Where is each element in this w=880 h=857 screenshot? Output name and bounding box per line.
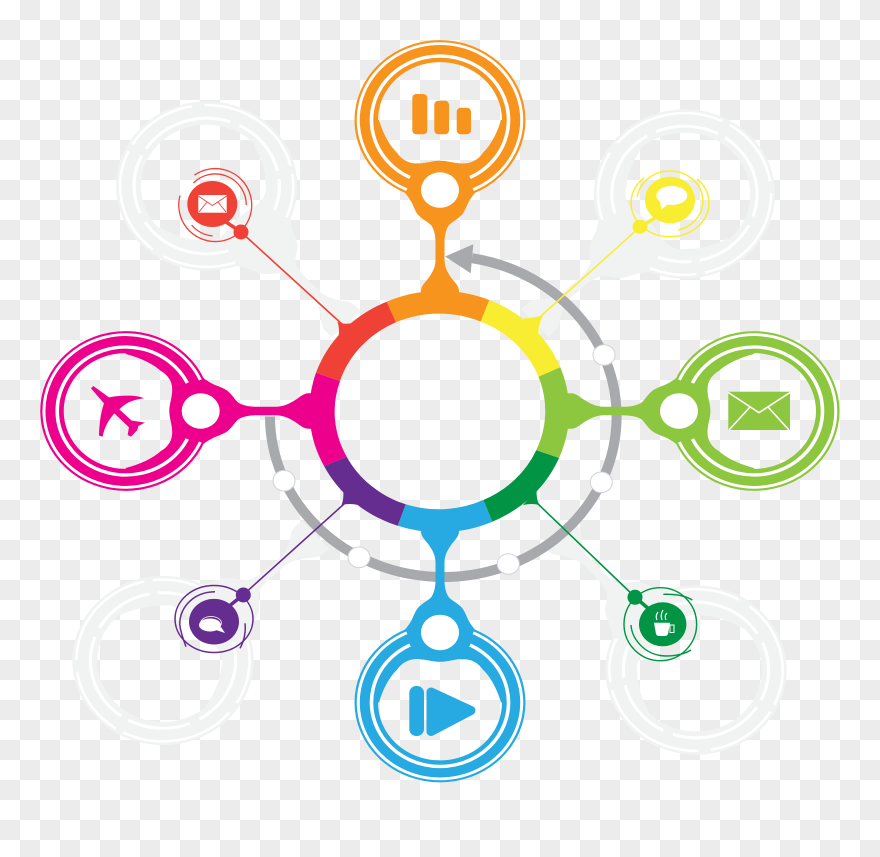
node circles xyxy=(273,345,615,574)
rings xyxy=(624,588,697,661)
large node: blue play xyxy=(358,523,522,779)
icon: bar chart xyxy=(412,94,471,134)
rings xyxy=(631,171,709,237)
connector line xyxy=(241,232,343,325)
small node: red mail xyxy=(179,169,352,337)
disc and pin xyxy=(189,588,251,644)
ghost ring: top right xyxy=(476,80,807,382)
disc and pin xyxy=(187,181,248,240)
segment: magenta xyxy=(309,373,347,466)
connector line xyxy=(537,503,635,597)
connector line xyxy=(541,227,640,316)
small node: yellow chat xyxy=(523,171,709,336)
segment: yellow xyxy=(481,300,560,377)
magenta ring and stem xyxy=(44,335,318,487)
small node: purple chat xyxy=(175,490,358,652)
disc and pin xyxy=(632,177,695,234)
icon: play xyxy=(409,686,471,736)
icon: speech bubble xyxy=(656,186,687,209)
small node: green coffee xyxy=(523,490,697,661)
arrow arc xyxy=(270,258,617,577)
flare on ring xyxy=(342,490,358,505)
icon: envelope xyxy=(198,195,227,213)
flare on ring xyxy=(523,315,543,336)
central segmented ring xyxy=(309,291,569,532)
ghost ring: top left xyxy=(84,72,409,380)
large node: magenta plane xyxy=(44,335,318,487)
blue ring and stem xyxy=(358,523,522,779)
ghost ring: bottom right xyxy=(493,476,818,784)
green ring and stem xyxy=(562,335,836,487)
segment: dark green xyxy=(483,450,559,522)
segment: orange xyxy=(387,291,489,322)
disc and pin xyxy=(628,590,686,646)
ghost ring: bottom left xyxy=(41,474,373,775)
orange ring and stem xyxy=(358,44,522,299)
flare on ring xyxy=(337,322,352,337)
arrow head xyxy=(445,244,473,273)
flare on ring xyxy=(523,490,539,505)
large node: green envelope xyxy=(562,335,836,487)
rings xyxy=(175,586,253,652)
segment: blue xyxy=(398,500,492,532)
rings xyxy=(179,169,252,242)
icon: coffee cup xyxy=(654,610,674,636)
segment: purple xyxy=(324,457,406,526)
icon: plane xyxy=(91,386,145,437)
large node: orange chart xyxy=(358,44,522,299)
grey circular arrow with nodes xyxy=(270,244,617,577)
segment: light green xyxy=(536,367,569,458)
segment: red xyxy=(316,302,396,381)
icon: speech bubbles xyxy=(199,616,225,633)
connector line xyxy=(243,504,344,595)
icon: envelope xyxy=(728,392,790,430)
